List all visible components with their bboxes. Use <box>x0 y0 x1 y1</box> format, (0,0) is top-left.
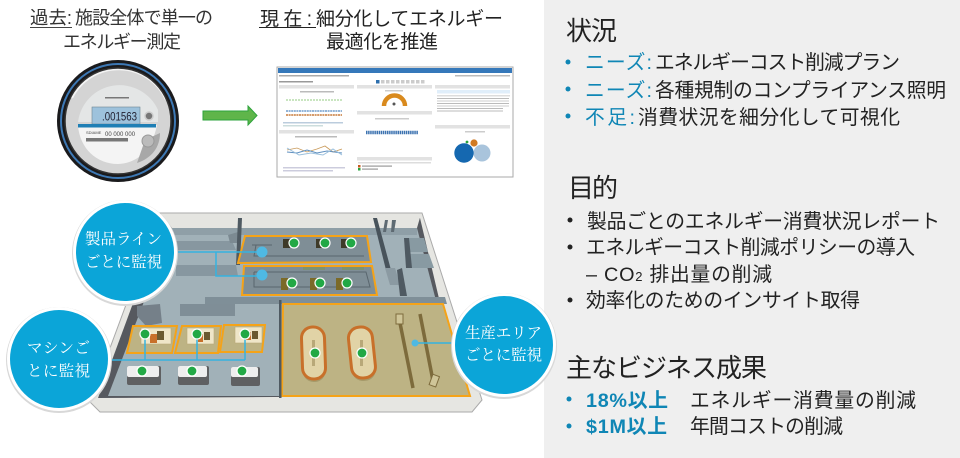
bullet: needs 1: ニーズ: <box>585 52 652 74</box>
zones: individual machines <box>127 325 265 353</box>
sub-bullet: CO2: – CO2 排出量の削減 <box>586 264 772 286</box>
result: energy reduction: エネルギー消費量の削減 <box>690 390 916 412</box>
post <box>279 300 282 398</box>
callout: per machine: とに監視 <box>27 362 90 380</box>
green sensor dots <box>137 238 367 376</box>
bullet: needs 2: 各種規制のコンプライアンス照明 <box>655 80 946 102</box>
callout: per machine <box>6 307 112 413</box>
factory floor <box>108 228 461 396</box>
heading: past: 施設全体で単一の <box>75 8 213 28</box>
heading: present: 細分化してエネルギー <box>316 8 503 30</box>
icon: energy meter: SDIAME <box>86 130 102 135</box>
callout: per production area: 生産エリア <box>465 323 542 342</box>
result: annual cost <box>566 416 843 438</box>
line machines <box>281 239 347 290</box>
blue monitor points <box>256 246 418 346</box>
callout: per product line <box>72 200 178 306</box>
zone: production area <box>282 304 470 396</box>
bullet: per-product report: 製品ごとのエネルギー消費状況レポート <box>587 211 940 233</box>
grey machines <box>127 366 260 386</box>
bullet: shortfall: 消費状況を細分化して可視化 <box>638 107 900 129</box>
factory floor plan <box>90 213 482 412</box>
section: business results <box>566 353 916 438</box>
oval production cells <box>301 326 377 382</box>
heading: present <box>259 8 503 53</box>
arrow: past to present <box>203 106 257 125</box>
callout: per product line: ごとに監視 <box>85 253 162 271</box>
result: annual cost: $1M以上 <box>586 416 667 438</box>
result: energy reduction: 18%以上 <box>586 390 668 412</box>
production line conveyors <box>252 245 370 287</box>
bullet: needs 1: エネルギーコスト削減プラン <box>655 52 900 74</box>
heading: situation: 状況 <box>566 16 617 46</box>
connector lines <box>105 252 460 360</box>
callout: per product line: 製品ライン <box>85 229 162 248</box>
result: energy reduction <box>566 390 916 412</box>
heading: past: エネルギー測定 <box>63 32 181 52</box>
heading: present: 現在: <box>260 8 312 30</box>
bullet: insights: 効率化のためのインサイト取得 <box>586 290 860 312</box>
dashboard screenshot <box>277 67 513 177</box>
icon: energy meter: .001563 <box>102 110 137 124</box>
callout: per production area <box>451 293 557 399</box>
right panel background <box>544 0 960 458</box>
callout: per machine: マシンご <box>27 339 90 357</box>
factory outer shell <box>90 213 482 412</box>
callout: per production area: ごとに監視 <box>465 346 542 364</box>
heading: objectives: 目的 <box>568 173 618 203</box>
zone: lower production line <box>242 266 377 295</box>
heading: present: 最適化を推進 <box>326 31 438 53</box>
heading: business results: 主なビジネス成果 <box>566 353 767 383</box>
bullet: shortfall: 不足: <box>585 107 635 129</box>
factory side walls <box>98 218 462 398</box>
factory back wall <box>161 214 421 228</box>
result: annual cost: 年間コストの削減 <box>690 416 843 438</box>
left corridor shelves <box>137 218 447 326</box>
racks <box>396 314 439 388</box>
icon: energy meter <box>57 60 179 182</box>
section: situation <box>566 16 946 129</box>
bullet: needs 2: ニーズ: <box>585 80 652 102</box>
heading: past <box>30 8 213 52</box>
zone: upper production line <box>238 236 371 263</box>
section: objectives <box>568 173 940 312</box>
icon: energy meter: 00 000 000 <box>105 132 136 138</box>
bullet: cost policy: エネルギーコスト削減ポリシーの導入 <box>586 237 915 259</box>
tan machines <box>141 327 262 344</box>
right side partitions <box>373 218 434 296</box>
heading: past: 過去: <box>30 8 72 28</box>
